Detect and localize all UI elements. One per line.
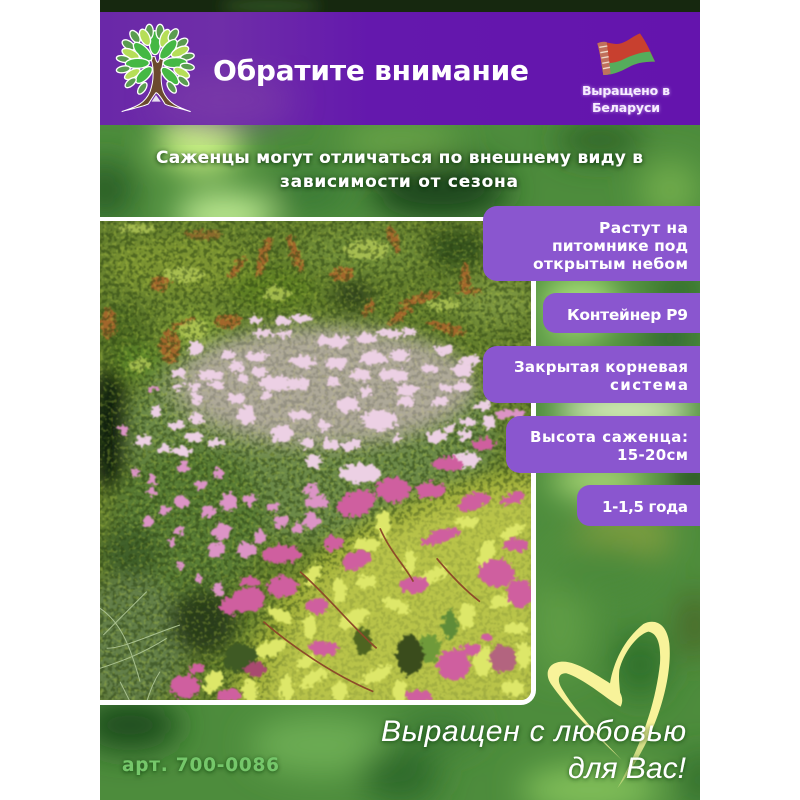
notice text: Саженцы могут отличаться по внешнему виду в <box>156 148 643 168</box>
spec badge: root system <box>483 346 700 403</box>
icon: flag of Belarus <box>597 33 655 75</box>
grass blades <box>100 592 180 702</box>
flag caption: Выращено в <box>582 83 670 98</box>
slogan: Выращен с любовью <box>381 715 686 748</box>
header band <box>100 12 700 128</box>
spec badge: container <box>543 293 700 333</box>
spec badge: seedling height: 15-20см <box>617 446 688 464</box>
brown shoots <box>100 223 482 363</box>
foliage and shadows <box>73 228 533 708</box>
flag caption <box>582 83 670 115</box>
spec badge: growing conditions: открытым небом <box>533 255 688 273</box>
spec badge: container: Контейнер Р9 <box>567 306 688 324</box>
logo: tree <box>116 24 195 112</box>
spec badge: seedling height <box>506 416 700 473</box>
spec badge: root system: система <box>610 376 688 394</box>
spec badge: growing conditions: Растут на <box>599 219 688 237</box>
spec badge: growing conditions <box>483 206 700 281</box>
spec badge: seedling height: Высота саженца: <box>530 428 688 446</box>
deep pink flower clusters <box>170 438 533 703</box>
article number: арт. 700-0086 <box>122 755 279 776</box>
branches <box>263 528 480 692</box>
pale pink flower clusters <box>135 314 495 483</box>
spec badge: age <box>577 485 700 526</box>
spec badge: growing conditions: питомнике под <box>552 237 688 255</box>
leaves of the golden shrub <box>200 510 531 705</box>
photo: flowering spirea bushes <box>73 221 540 712</box>
slogan second line: для Вас! <box>568 752 687 785</box>
tree leaves <box>116 24 195 96</box>
title: Обратите внимание <box>213 54 529 87</box>
flower and leaf haze <box>180 328 540 712</box>
foliage texture <box>100 221 531 700</box>
bright foliage highlights <box>117 224 460 372</box>
tree trunk <box>122 55 191 112</box>
flag caption: Беларуси <box>592 100 660 115</box>
photo frame <box>100 217 536 705</box>
spec badge: root system: Закрытая корневая <box>514 358 688 376</box>
mid pink flower clusters <box>118 386 525 597</box>
icon: hand-drawn heart <box>548 622 670 788</box>
notice text: зависимости от сезона <box>280 172 518 192</box>
spec badge: age: 1-1,5 года <box>602 498 688 516</box>
notice text <box>156 148 643 192</box>
